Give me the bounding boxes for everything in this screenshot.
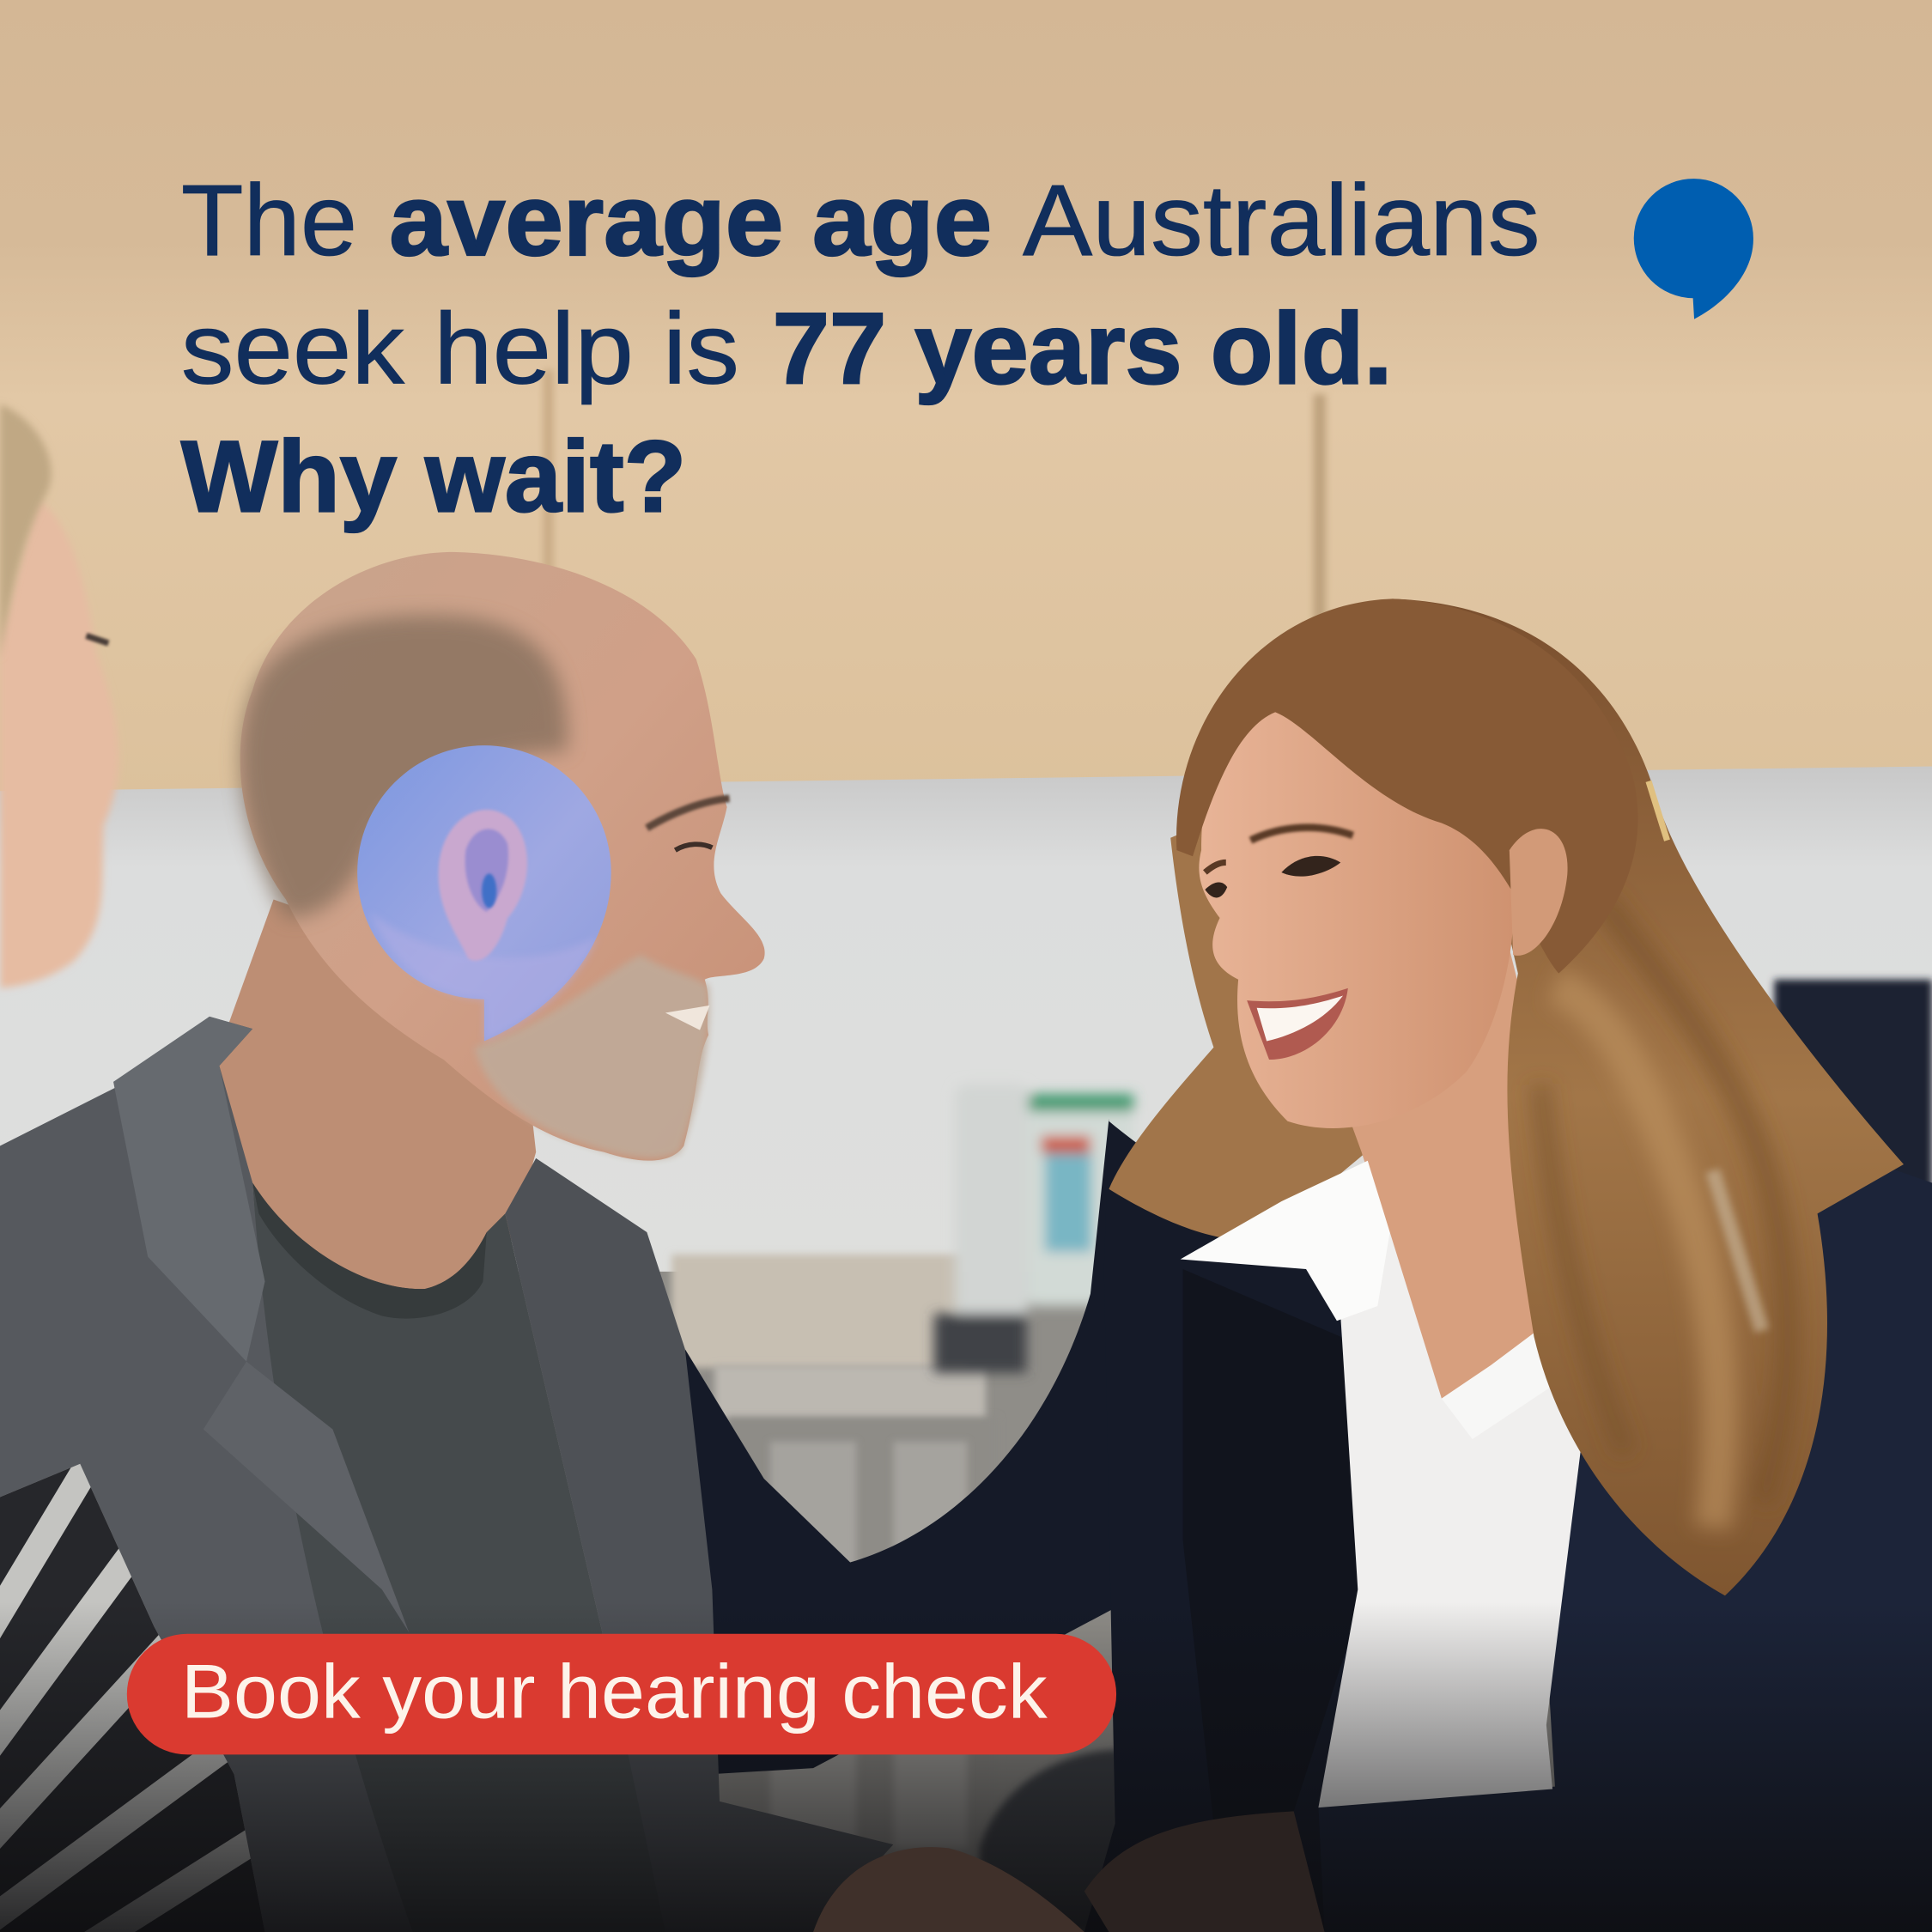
brows and eyes <box>1250 828 1353 841</box>
eyebrow and eye <box>647 799 729 828</box>
dark monitor <box>1774 980 1932 1189</box>
right hair <box>1392 598 1904 1595</box>
person: man <box>0 552 1113 1932</box>
speech bubble icon <box>1634 179 1753 319</box>
mouth <box>1247 988 1348 1060</box>
headline: The <box>181 163 357 276</box>
left hair wisps <box>1109 801 1374 1240</box>
striped top of woman <box>0 1448 271 1932</box>
headline: Australians <box>1023 163 1540 276</box>
person: woman at left edge <box>0 404 118 988</box>
fringe and crown <box>1176 598 1638 974</box>
chair <box>980 1750 1121 1932</box>
t-shirt collar <box>252 1183 487 1319</box>
bottles <box>934 1084 1133 1373</box>
hand: right <box>1084 1811 1325 1932</box>
ear shape <box>439 810 527 961</box>
headline: 77 years old. <box>773 291 1392 404</box>
button: book your hearing check <box>127 1634 1116 1754</box>
foreground dark fade <box>0 1601 1932 1932</box>
wood cabinets <box>0 0 1932 801</box>
counter <box>671 1255 967 1368</box>
icon: ear speech bubble <box>357 745 611 1042</box>
ear <box>1510 829 1568 956</box>
shirt collar <box>1181 1161 1390 1321</box>
beard <box>474 955 709 1158</box>
headline: Why wait? <box>181 420 686 533</box>
face <box>1199 708 1514 1128</box>
headline: average age <box>389 163 992 276</box>
headline <box>181 163 1540 533</box>
hair clip <box>1649 781 1667 841</box>
jacket lapel <box>113 1017 265 1362</box>
shaved hair shading <box>240 615 568 918</box>
blazer arm of consultant <box>685 1119 1113 1774</box>
hand: left <box>813 1847 1084 1932</box>
jacket right <box>505 1158 893 1932</box>
head <box>240 552 765 1161</box>
person: woman consultant <box>1084 598 1932 1932</box>
headline: seek help is <box>181 291 739 404</box>
jacket left <box>0 1017 413 1932</box>
shirt <box>1318 1232 1595 1807</box>
blazer body <box>1084 1121 1380 1932</box>
neck <box>216 900 536 1306</box>
button: book your hearing check: Book your hearing check <box>181 1648 1048 1734</box>
neck <box>1337 949 1595 1405</box>
t-shirt <box>252 1183 671 1932</box>
